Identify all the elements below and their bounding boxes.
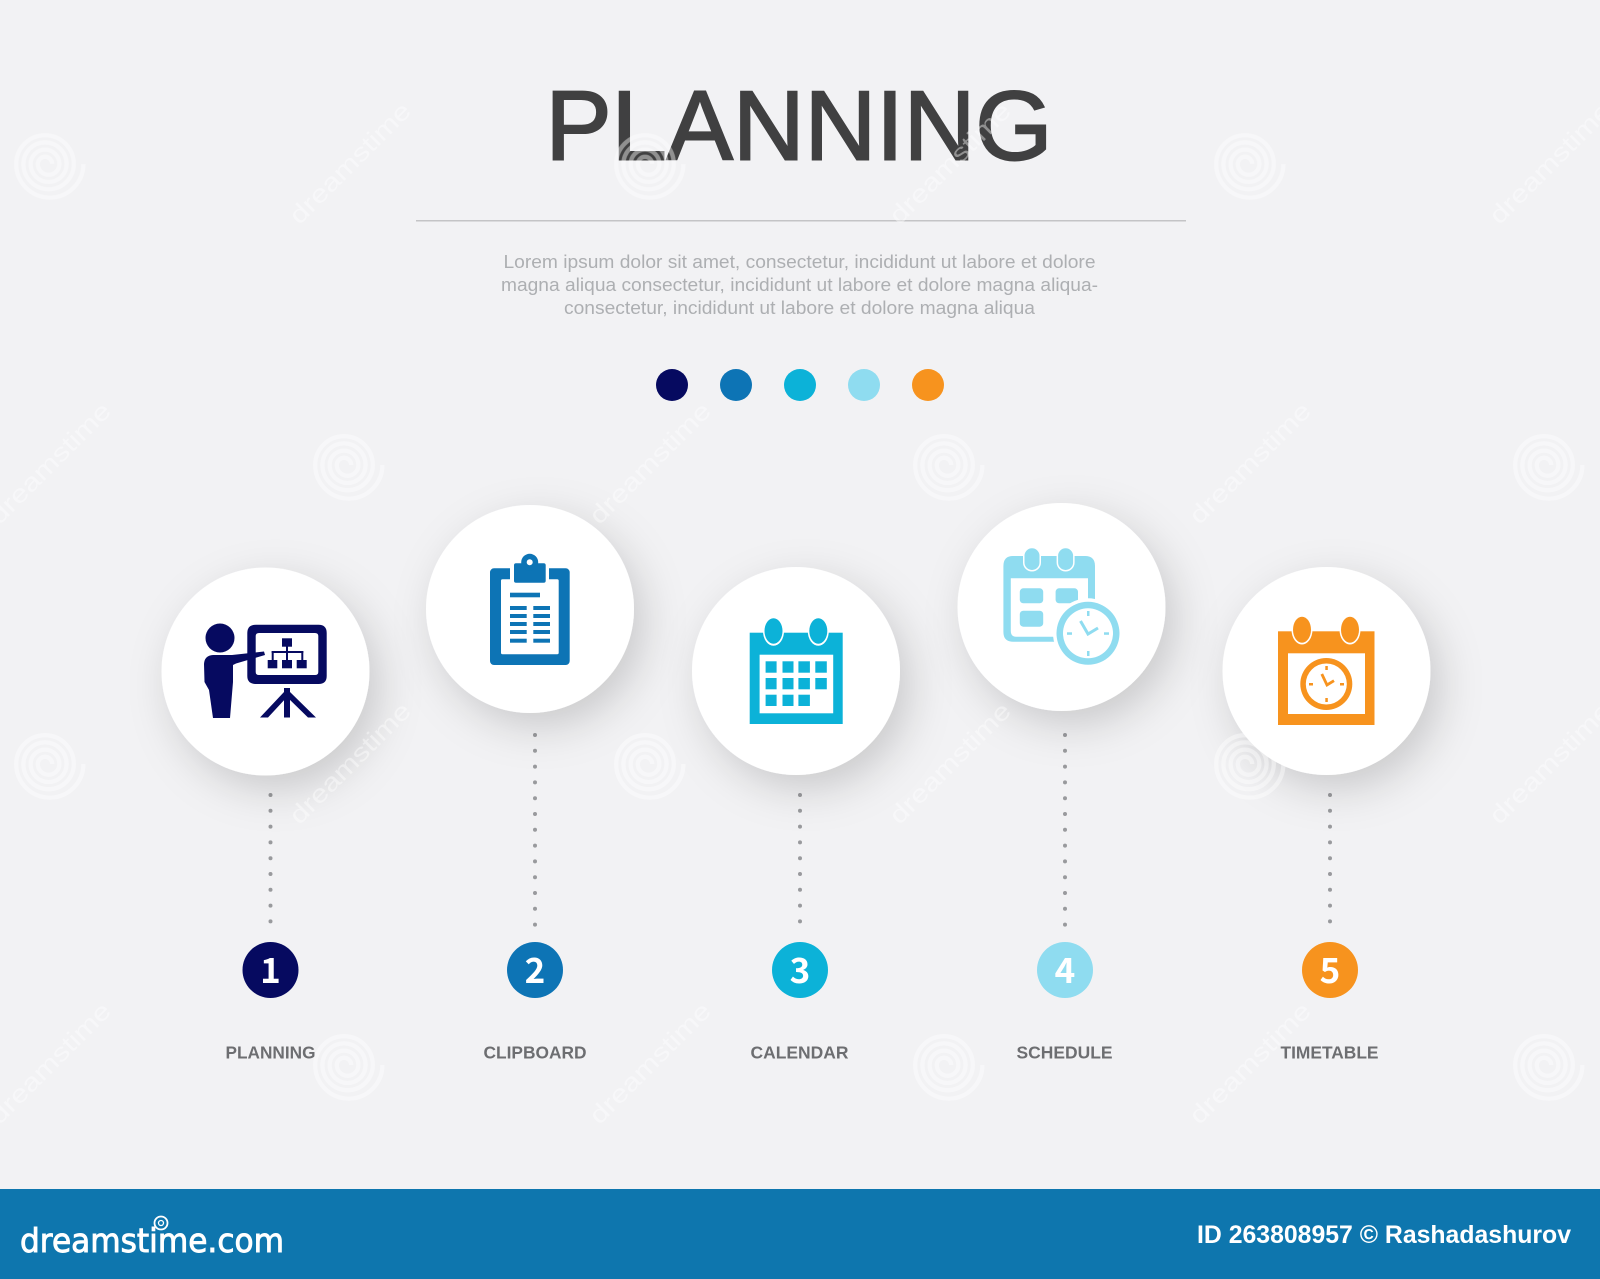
title: PLANNING xyxy=(546,70,1052,180)
watermark overlay: dreamstime xyxy=(584,997,717,1130)
label: calendar: CALENDAR xyxy=(750,1042,849,1062)
panel: white circle 5 xyxy=(1222,567,1430,775)
panel: white circle 2 xyxy=(426,505,634,713)
watermark overlay: dreamstime xyxy=(284,697,417,830)
dotted connector 1 xyxy=(268,795,272,925)
label: planning: PLANNING xyxy=(226,1042,316,1062)
icon: presenter with org chart board xyxy=(204,624,327,718)
icon: schedule calendar with clock xyxy=(1003,546,1123,668)
dotted connector 4 xyxy=(1063,735,1067,925)
number badge 1 xyxy=(242,942,298,998)
number badge 3: 3 xyxy=(790,943,810,994)
dotted connector 2 xyxy=(533,735,537,925)
number badge 5 xyxy=(1302,942,1358,998)
footer bar xyxy=(0,1189,1600,1279)
footer logo: dreamstime.com xyxy=(20,1221,284,1260)
watermark overlay: dreamstime xyxy=(884,697,1017,830)
watermark overlay: dreamstime xyxy=(1184,997,1317,1130)
panel: white circle 4 xyxy=(958,503,1166,711)
description text xyxy=(501,251,1098,318)
panel: white circle 1 xyxy=(162,568,370,776)
number badge 2 xyxy=(507,942,563,998)
label: clipboard: CLIPBOARD xyxy=(484,1042,586,1062)
icon: timetable calendar with clock xyxy=(1278,615,1374,725)
description text: Lorem ipsum dolor sit amet, consectetur, incididunt ut labore et dolore xyxy=(504,251,1096,272)
number badge 5: 5 xyxy=(1320,943,1340,994)
watermark overlay: dreamstime xyxy=(1184,397,1317,530)
watermark overlay: dreamstime xyxy=(884,97,1017,230)
dotted connector 3 xyxy=(798,795,802,925)
footer image id and credit: ID 263808957 © Rashadashurov xyxy=(1197,1221,1571,1249)
number badge 1: 1 xyxy=(260,943,281,994)
panel: white circle 3 xyxy=(692,567,900,775)
icon: calendar xyxy=(750,617,843,724)
label: timetable: TIMETABLE xyxy=(1280,1042,1378,1062)
number badge 4: 4 xyxy=(1055,943,1075,994)
number badge 3 xyxy=(772,942,828,998)
number badge 4 xyxy=(1037,942,1093,998)
icon: clipboard xyxy=(490,554,570,665)
description text: magna aliqua consectetur, incididunt ut labore et dolore magna aliqua- xyxy=(501,274,1098,295)
dotted connector 5 xyxy=(1328,795,1332,925)
description text: consectetur, incididunt ut labore et dolore magna aliqua xyxy=(564,297,1036,318)
watermark overlay: dreamstime xyxy=(1484,97,1600,230)
watermark overlay: dreamstime xyxy=(284,97,417,230)
colour legend dots xyxy=(656,369,944,401)
watermark overlay: dreamstime xyxy=(1484,697,1600,830)
label: schedule: SCHEDULE xyxy=(1016,1042,1112,1062)
watermark overlay: dreamstime xyxy=(584,397,717,530)
number badge 2: 2 xyxy=(525,943,545,994)
